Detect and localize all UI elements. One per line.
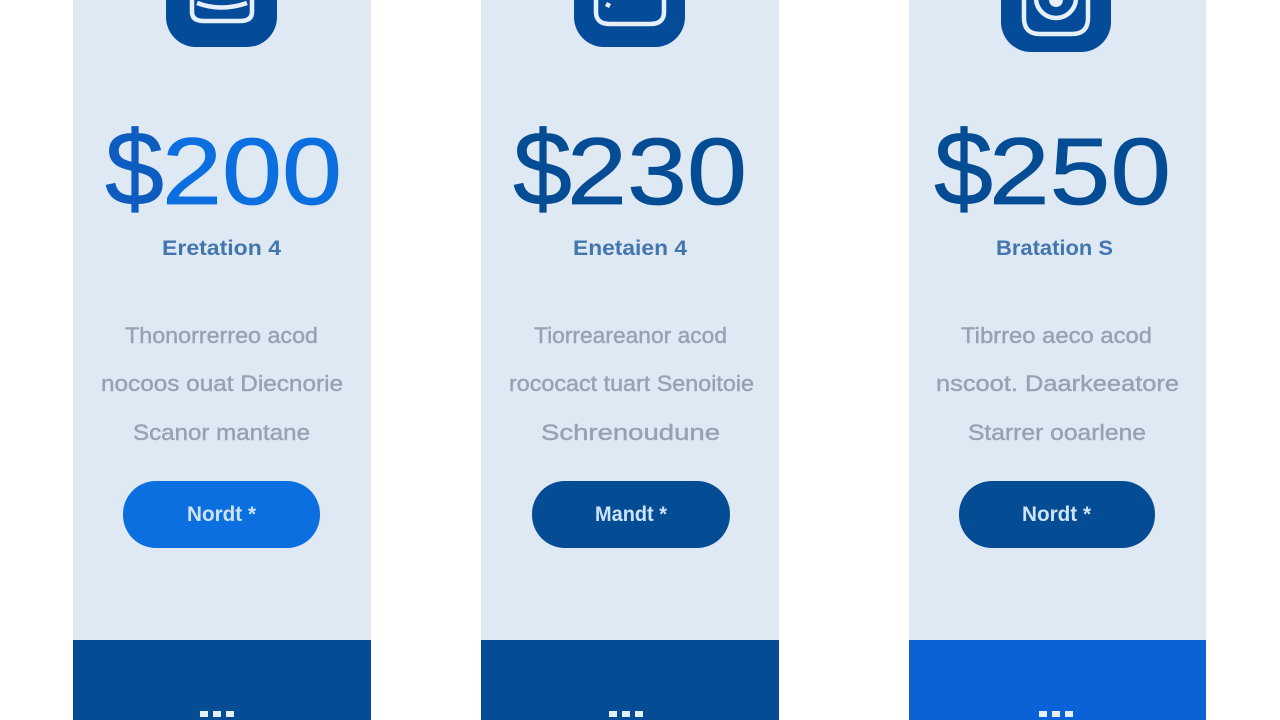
description text: Scanor mantane — [133, 420, 310, 445]
plan label: Bratation S — [996, 237, 1113, 260]
price: $250 — [934, 110, 1171, 228]
plan label: Enetaien 4 — [573, 237, 687, 260]
description text: nscoot. Daarkeeatore — [936, 371, 1179, 396]
description text: Starrer ooarlene — [968, 420, 1146, 445]
price: $230: 230 — [567, 119, 747, 225]
pricing column 1 — [73, 0, 371, 720]
description text: Tibrreo aeco acod — [961, 323, 1152, 348]
description text — [936, 323, 1179, 445]
description text: Tiorreareanor acod — [534, 323, 727, 348]
price: $250: $ — [934, 110, 993, 228]
plan label: Eretation 4 — [162, 237, 281, 260]
footer band with dots — [73, 640, 371, 720]
price: $230: $ — [513, 110, 572, 228]
icon: stacked disc — [166, 0, 277, 47]
pricing column 2 — [481, 0, 779, 720]
button: Nordt * — [187, 503, 257, 526]
price: $250: 250 — [989, 119, 1171, 225]
button: Nordt * — [1022, 503, 1092, 526]
panel background 1 — [73, 0, 371, 640]
price: $200 — [105, 110, 342, 228]
button — [532, 481, 730, 548]
description text — [509, 323, 754, 445]
icon: rounded screen — [574, 0, 685, 47]
panel background 2 — [481, 0, 779, 640]
panel background 3 — [909, 0, 1206, 640]
description text: Schrenoudune — [541, 420, 720, 445]
pricing column 3 — [909, 0, 1206, 720]
footer band with dots — [481, 640, 779, 720]
button: Mandt * — [595, 503, 668, 526]
footer band with dots — [909, 640, 1206, 720]
price: $200: $ — [105, 110, 164, 228]
description text — [101, 323, 343, 445]
description text: Thonorrerreo acod — [125, 323, 318, 348]
description text: rococact tuart Senoitoie — [509, 371, 754, 396]
price: $200: 200 — [162, 119, 342, 225]
description text: nocoos ouat Diecnorie — [101, 371, 343, 396]
button — [123, 481, 320, 548]
icon: concentric target — [1001, 0, 1111, 52]
price: $230 — [513, 110, 747, 228]
button — [959, 481, 1155, 548]
